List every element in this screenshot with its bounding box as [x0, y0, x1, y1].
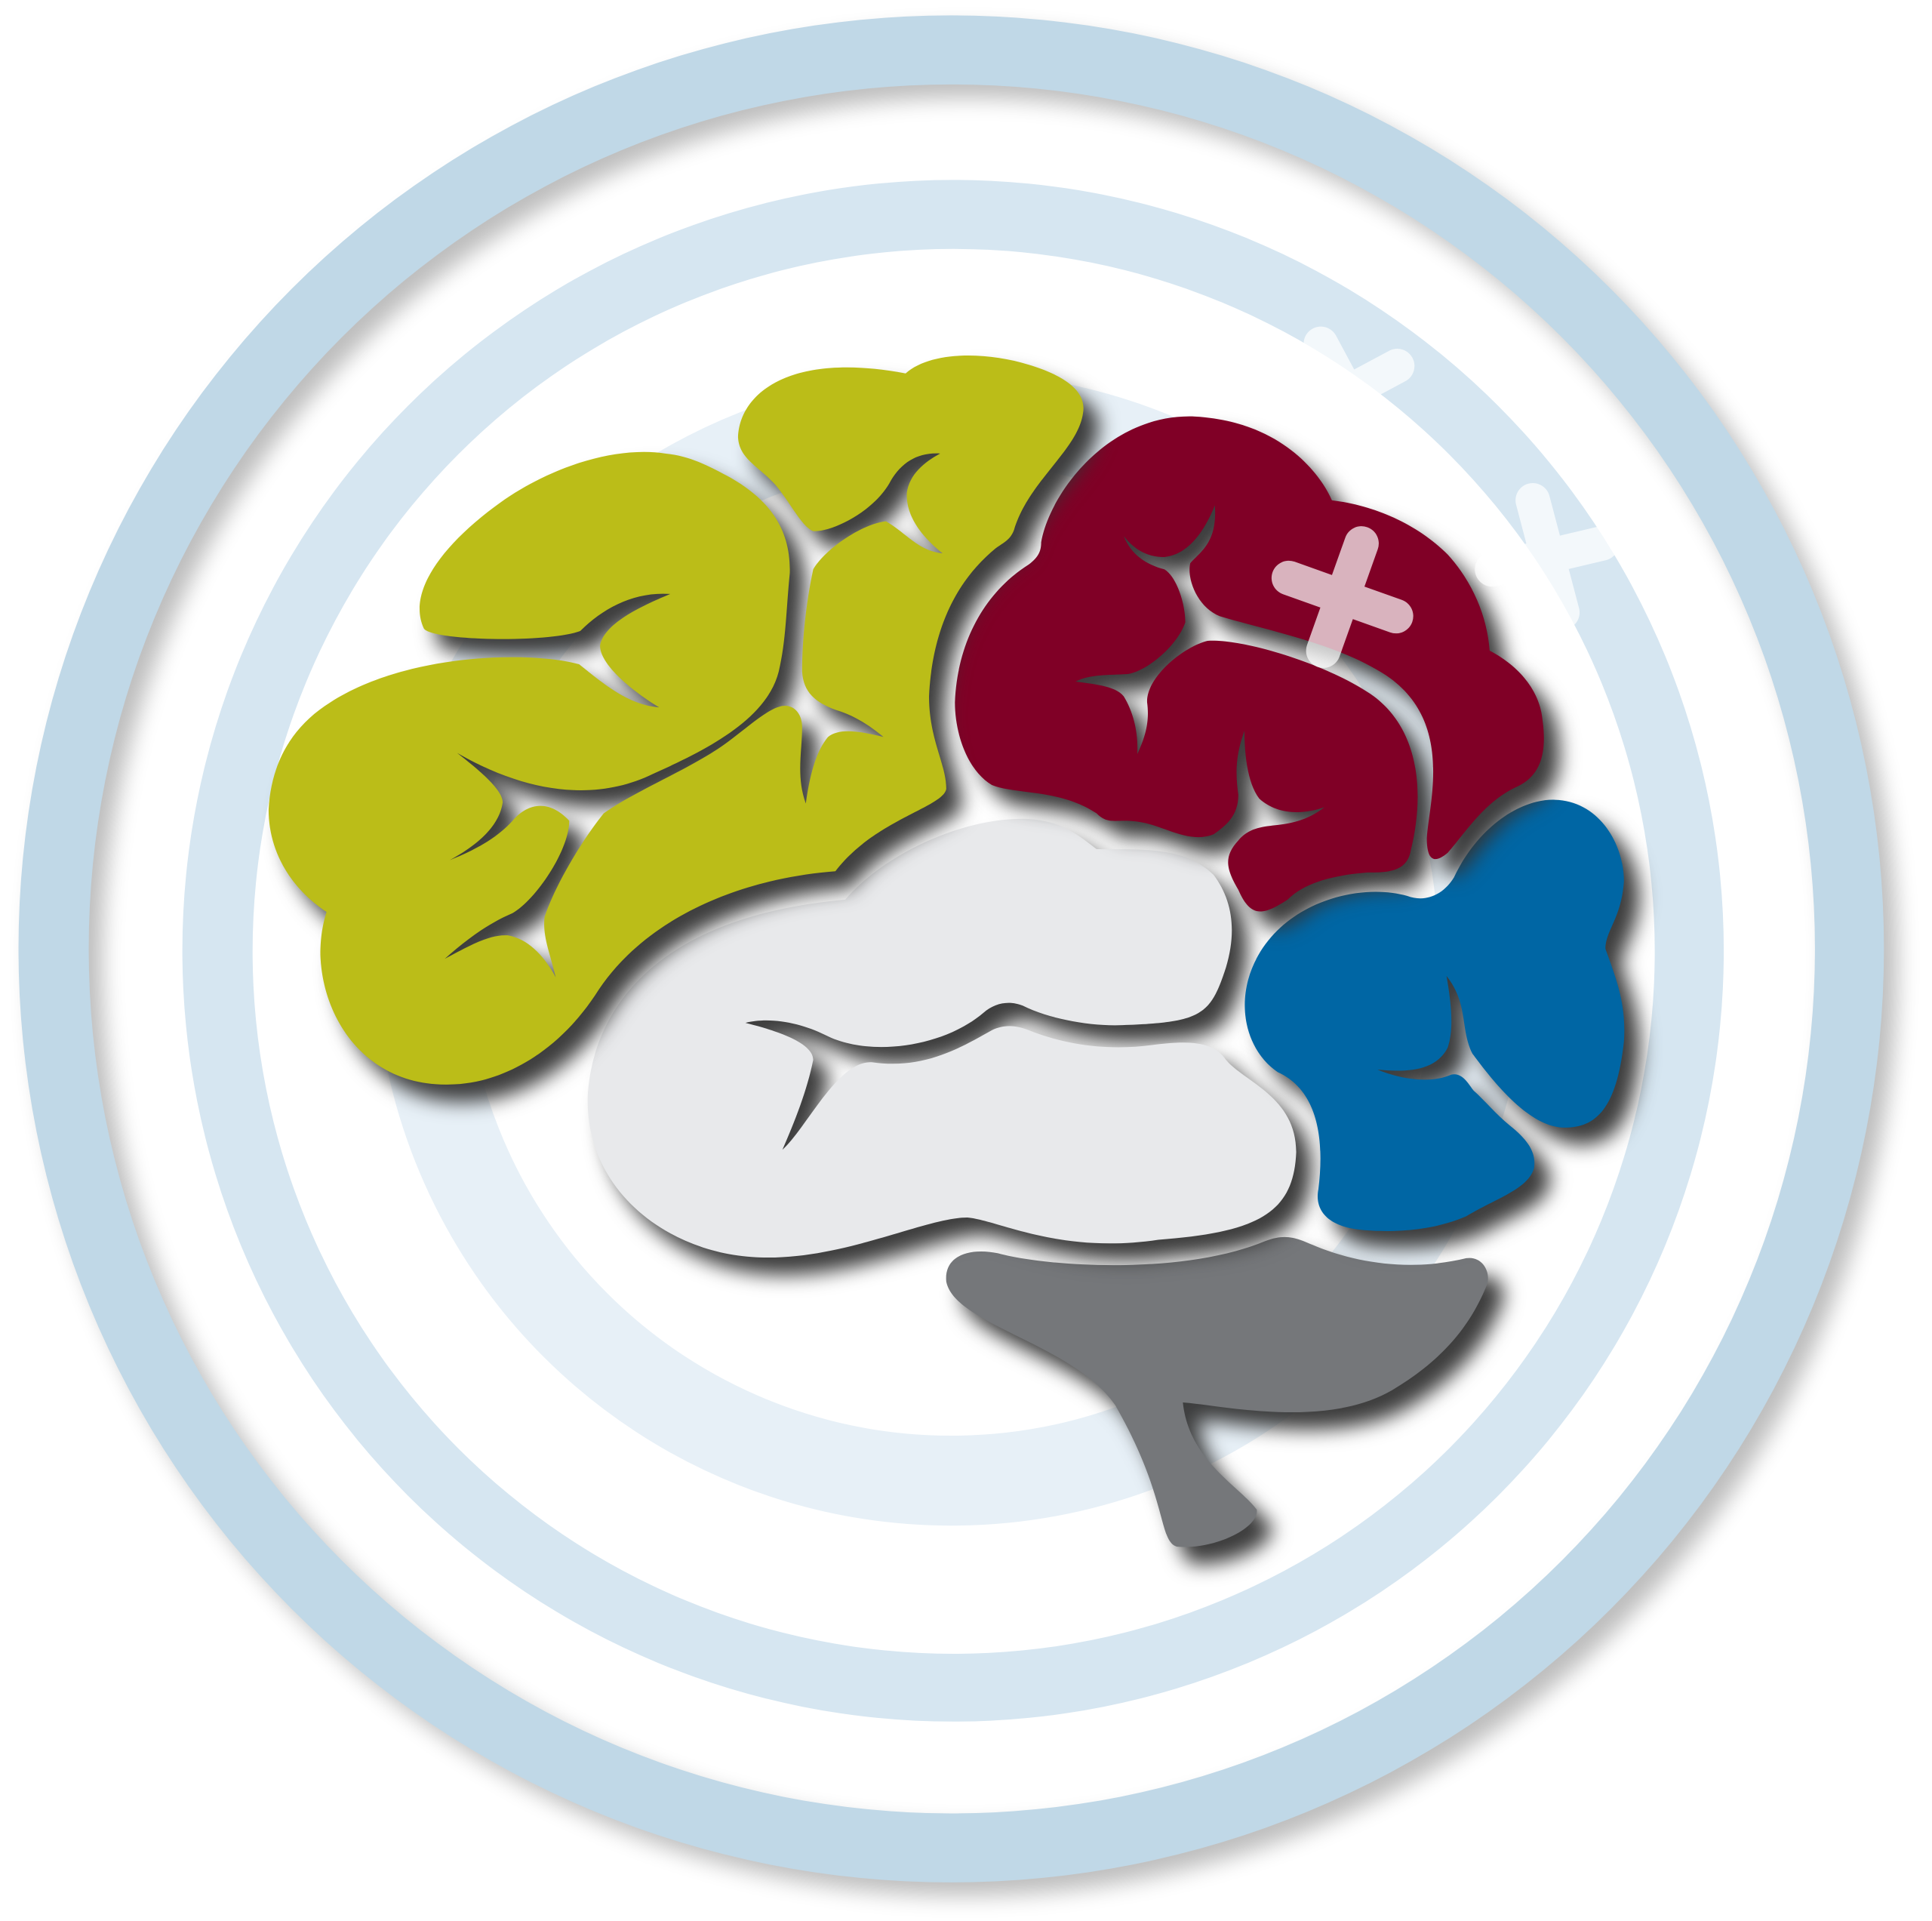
icon: plus upper ring: [1310, 344, 1397, 429]
icon: plus signs: [1289, 344, 1601, 651]
parietal lobe: [955, 417, 1544, 911]
cerebellum: [946, 1237, 1488, 1547]
temporal lobe: [588, 819, 1297, 1258]
frontal lobe: [269, 356, 1084, 1085]
inner ring: [420, 417, 1483, 1481]
icon: plus right ring: [1492, 500, 1601, 612]
middle ring: [183, 180, 1724, 1722]
icon: plus on parietal lobe: [1289, 543, 1396, 651]
occipital lobe: [1244, 800, 1624, 1231]
